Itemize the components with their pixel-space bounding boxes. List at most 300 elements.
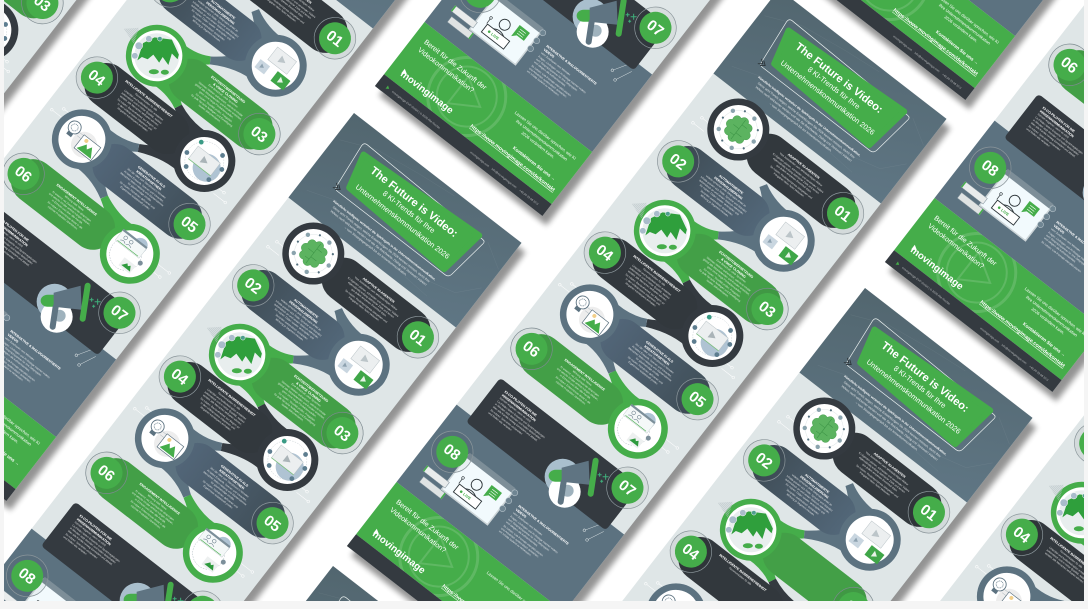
trend 01: 01 — [406, 326, 429, 350]
trend 04: wirklich alle Menschen teilhaben können. — [202, 393, 243, 426]
trend 04: automatisch und in hoher Qualität, sodass — [121, 91, 163, 125]
footer band: info@movingimage.com — [491, 167, 518, 190]
trend 01: Vom Assistenten zum selbstständigen Akteur — [779, 151, 824, 187]
trend 01: Vom Assistenten zum selbstständigen Akteur — [865, 450, 910, 486]
trend 02: Inhalte passen sich Rolle, Sprache und Standort — [786, 474, 834, 512]
header with title box: Unternehmenskommunikation 2026 — [865, 357, 963, 436]
trend 05: Von der Idee zum Storyboard in Minuten — [126, 167, 167, 200]
footer band: movingimage — [370, 529, 427, 577]
footer band: https://www.movingimage.com/de/kontakt — [469, 124, 556, 193]
trend 01: Freigaben beim Team belassen. — [348, 296, 381, 322]
header with title box: Künstliche Intelligenz verändert die Spielregeln in der Unternehmenskommunikation. — [843, 374, 948, 456]
trend 04: 04 — [679, 540, 703, 564]
trend 06 — [1036, 27, 1088, 187]
trend 06: 06 — [94, 462, 118, 485]
footer band: movingimage EVP GmbH | © 2026 Alle Rechte — [391, 90, 441, 130]
trend 04: Vorgaben konsequent einhalten. — [624, 281, 657, 308]
trend 06: ENGAGEMENT INTELLIGENCE — [564, 358, 606, 392]
trend 07: Co-Piloten liefern Entwürfe und Sprachregelungen — [496, 399, 546, 439]
trend 07 — [4, 212, 141, 354]
trend 03 — [124, 24, 281, 156]
trend 07: So nutzen: Szenarien vorbereiten — [1028, 124, 1062, 152]
trend 05: Von der Idee zum Storyboard in Minuten — [634, 342, 675, 375]
trend 06 — [510, 328, 668, 459]
footer band: movingimage — [908, 245, 965, 293]
trend 04: Kommunikation für alle — [1059, 549, 1084, 569]
trend 02: PERSONALISIERUNG — [205, 1, 236, 26]
trend 05: 05 — [260, 512, 284, 536]
footer band: Ihre Unternehmenskommunikation — [1025, 295, 1079, 338]
header — [267, 566, 501, 609]
trend 04: Untertitel und Audiodeskription entstehen — [206, 388, 248, 421]
trend 03: für jede Sprache festlegen und Einwilligung — [698, 268, 742, 303]
trend 08: zum Gesprächspartner für Ihre Zielgruppen — [535, 57, 579, 92]
trend 03: Eine Botschaft, viele Sprachen — [716, 258, 747, 284]
trend 08: um Inhalte laufend zu verbessern. — [526, 69, 561, 97]
trend 08 — [4, 554, 76, 601]
header with title box: Künstliche Intelligenz verändert die Spielregeln in der Unternehmenskommunikation. — [757, 75, 862, 157]
header with title box: 8 KI-Trends für Ihre — [381, 189, 437, 235]
trend 07: Co-Piloten liefern Entwürfe und Sprachregelungen — [1034, 115, 1084, 155]
poster: far right, lower part — [882, 0, 1088, 401]
trend 03: So nutzen: Tonalität prüfen, Freigaben — [195, 92, 234, 124]
connectors — [586, 184, 786, 403]
trend 01 — [781, 385, 966, 548]
poster: lower right — [430, 288, 1040, 609]
footer band: movingimage.com — [979, 326, 1001, 344]
trend 04: 04 — [1010, 523, 1034, 547]
trend 04: 04 — [85, 66, 109, 90]
header with title box: Diese acht Trends zeigen, welche Entwicklungen Sie 2026 kennen müssen, damit Ihre — [332, 205, 431, 283]
trend 06: in Echtzeit und über alle Kanäle. — [134, 497, 167, 524]
footer band: https://www.movingimage.com/de/kontakt — [979, 300, 1066, 369]
poster: centre-right — [344, 0, 954, 609]
trend 05: KREATIVPARTNER — [135, 169, 163, 192]
trend 03 — [207, 324, 364, 454]
trend 01: aus jedem einzelnen Durchlauf dazu. — [775, 163, 813, 194]
trend 07: KI-CO-PILOTEN FÜR DIE — [504, 389, 539, 418]
trend 04: Untertitel und Audiodeskription entstehen — [1048, 546, 1088, 579]
trend 02: So nutzen: Daten sauber verknüpfen und — [785, 482, 826, 516]
trend 02: Inhalte passen sich Rolle, Sprache und Standort — [700, 175, 748, 213]
trend 01: Freigaben beim Team belassen. — [773, 172, 806, 198]
trend 05 — [560, 284, 719, 420]
footer band — [896, 214, 1088, 385]
footer band: Ihre Unternehmenskommunikation — [938, 3, 992, 46]
trend 07: KRISENKOMMUNIKATION — [76, 517, 112, 547]
trend 03: & VOICE CLONING — [295, 381, 322, 403]
trend 08: Fragen, Umfragen und KI-Dialoge machen Videos — [509, 515, 559, 555]
trend 05: Ergebnisse redaktionell prüfen. — [202, 484, 234, 510]
trend 02: PERSONALISIERUNG — [288, 300, 319, 325]
trend 07: Co-Piloten liefern Entwürfe und Sprachregelungen — [71, 523, 121, 563]
header with title box — [288, 113, 522, 327]
trend 06: und welche Inhalte wirklich hängen bleiben, — [556, 367, 600, 402]
footer band: Lassen Sie uns darüber sprechen, wie KI — [514, 110, 577, 161]
trend 08: und Antworten systematisch auswerten, — [528, 66, 568, 99]
header with title box: – vom Strategiegespräch bis zur Krisenkommunikation. — [855, 401, 919, 452]
trend 06: Wirkung statt Views — [64, 194, 85, 212]
trend 07: Schnell reagieren, wenn es zählt — [499, 396, 532, 423]
trend 04: wirklich alle Menschen teilhaben können. — [119, 94, 160, 127]
trend 01: 01 — [323, 27, 346, 51]
trend 03: ECHTZEITÜBERSETZUNG — [210, 74, 247, 104]
trend 08: 08 — [978, 157, 1002, 180]
trend 06: 06 — [519, 338, 543, 361]
trend 07: KRISENKOMMUNIKATION — [501, 393, 537, 423]
trend 07: in Minuten statt Stunden und halten Botschaften — [1032, 118, 1080, 157]
connectors — [162, 308, 362, 527]
trend 08: und steigern die Aufmerksamkeit. — [505, 520, 539, 548]
trend 01: Freigaben beim Team belassen. — [859, 471, 892, 497]
trend 04: Kommunikation für alle — [217, 391, 242, 411]
trend 08: VIDEOS — [1053, 224, 1066, 235]
trend 08: Fragen, Umfragen und KI-Dialoge machen Videos — [1, 340, 51, 380]
footer band — [369, 499, 552, 609]
trend 01 — [282, 222, 440, 358]
trend 06: So nutzen: Erkenntnisse direkt in die — [555, 375, 592, 405]
poster: top centre, lower part — [375, 0, 726, 228]
header with title box: Unternehmenskommunikation 2026 — [354, 182, 452, 261]
footer band: movingimage.com — [892, 34, 914, 52]
trend 05: Menschen liefern Haltung und Markenstimme — [119, 171, 165, 208]
footer band: Bereit für die Zukunft der — [422, 39, 488, 92]
trend 02: automatisch an und wirken dadurch relevanter. — [784, 477, 831, 515]
trend 08: VIDEOS — [7, 333, 20, 344]
trend 04: Kommunikation für alle — [642, 267, 667, 287]
trend 05: KREATIVPARTNER — [643, 344, 671, 367]
trend 02: automatisch an und wirken dadurch relevanter. — [273, 302, 320, 340]
trend 05: Menschen liefern Haltung und Markenstimme — [202, 470, 248, 507]
trend 06: ENGAGEMENT INTELLIGENCE — [56, 183, 98, 217]
trend 02: Videos sprechen jede Zielgruppe direkt an — [705, 174, 748, 208]
trend 03: sauber dokumentieren. — [706, 278, 730, 298]
trend 06: So nutzen: Erkenntnisse direkt in die — [130, 499, 167, 529]
trend 03: So nutzen: Tonalität prüfen, Freigaben — [703, 267, 742, 299]
trend 02: Varianten automatisch ausspielen. — [700, 189, 734, 217]
trend 04: INTELLIGENTE BARRIEREFREIHEIT — [632, 254, 682, 294]
trend 04 — [986, 497, 1088, 609]
trend 02: 02 — [666, 150, 690, 174]
trend 07: KI-CO-PILOTEN FÜR DIE — [1042, 105, 1077, 134]
trend 07: über alle Kanäle hinweg konsistent und aktuell. — [67, 529, 114, 566]
trend 08: So nutzen: Live-Formate interaktiv planen — [502, 524, 544, 558]
trend 05: So nutzen: Richtlinien definieren und — [202, 479, 239, 509]
trend 07: und Rollen klar verteilen. — [62, 535, 88, 556]
trend 03 — [632, 200, 789, 330]
trend 04: automatisch und in hoher Qualität, sodass — [204, 390, 246, 424]
trend 06 — [4, 152, 160, 284]
trend 05: KI liefert Entwürfe, Szenen und Varianten, — [123, 170, 165, 203]
trend 03: sauber dokumentieren. — [281, 402, 305, 422]
footer band: movingimage.com — [469, 150, 491, 168]
trend 02: PERSONALISIERUNG — [713, 176, 744, 201]
trend 02: Wirkung je Segment messen. — [192, 18, 222, 43]
trend 06: nächste Produktion überführen. — [555, 380, 587, 406]
trend 03: & VOICE CLONING — [720, 257, 747, 279]
footer band: +49 30 33 08 22 0 — [941, 72, 963, 90]
trend 04: INTELLIGENTE BARRIEREFREIHEIT — [207, 378, 257, 418]
trend 07: in Minuten statt Stunden und halten Botschaften — [494, 402, 542, 441]
poster: far right bottom edge — [761, 271, 1088, 609]
trend 02: Varianten automatisch ausspielen. — [192, 14, 226, 42]
trend 05: KI liefert Entwürfe, Szenen und Varianten, — [631, 345, 673, 378]
trend 08: INTERAKTIVE & DIALOGORIENTIERTE — [9, 329, 62, 371]
trend 01: eigenständig entlang definierter Ziele und lernen — [772, 156, 821, 195]
trend 02: So nutzen: Daten sauber verknüpfen und — [699, 183, 740, 217]
trend 02: Videos sprechen jede Zielgruppe direkt an — [791, 473, 834, 507]
footer band — [892, 0, 1000, 89]
footer band: Kontaktieren Sie uns → — [1022, 321, 1067, 358]
trend 07: KI-CO-PILOTEN FÜR DIE — [79, 513, 114, 542]
poster: left column — [0, 0, 446, 510]
trend 03 — [1026, 458, 1088, 609]
trend 06: KI erkennt, wo Zuschauende abspringen — [135, 489, 175, 522]
trend 02: Varianten automatisch ausspielen. — [275, 313, 309, 341]
trend 03: 03 — [330, 422, 354, 446]
trend 04: INTELLIGENTE BARRIEREFREIHEIT — [124, 79, 174, 119]
header with title box: – vom Strategiegespräch bis zur Krisenkommunikation. — [769, 102, 833, 153]
trend 06: Wirkung statt Views — [147, 493, 168, 511]
trend 08: Vom Zuschauen zum Mitreden — [1050, 227, 1082, 253]
trend 03: Eine Botschaft, viele Sprachen — [291, 382, 322, 408]
header with title box: Diese acht Trends zeigen, welche Entwicklungen Sie 2026 kennen müssen, damit Ihre — [757, 81, 856, 159]
trend 01: Vom Assistenten zum selbstständigen Akteur — [354, 275, 399, 311]
trend 03: global alle Mitarbeitenden und Kunden erreichen, — [277, 381, 326, 420]
trend 08: zum Gesprächspartner für Ihre Zielgruppen — [0, 342, 43, 377]
trend 01: 01 — [917, 501, 940, 525]
trend 02: 02 — [241, 274, 265, 298]
trend 03: sauber dokumentieren. — [198, 103, 222, 123]
trend 08: 08 — [440, 441, 464, 464]
trend 01 — [250, 0, 356, 60]
trend 07: So nutzen: Szenarien vorbereiten — [65, 532, 99, 560]
trend 08: Vom Zuschauen zum Mitreden — [540, 51, 572, 77]
trend 07: in Minuten statt Stunden und halten Botschaften — [69, 526, 117, 565]
trend 04: Kommunikation für alle — [728, 566, 753, 586]
trend 03: ECHTZEITÜBERSETZUNG — [718, 249, 755, 279]
trend 07: Schnell reagieren, wenn es zählt — [1037, 112, 1070, 139]
trend 01: aus jedem einzelnen Durchlauf dazu. — [861, 462, 899, 493]
trend 02 — [657, 140, 815, 272]
trend 02: AUTOMATISIERTE — [804, 473, 831, 495]
header with title box — [713, 0, 947, 203]
trend 03: Stimmen bleiben authentisch, während Inhalte — [281, 380, 327, 417]
trend 02 — [232, 264, 390, 396]
trend 03: & VOICE CLONING — [212, 82, 239, 104]
trend 02: Wirkung je Segment messen. — [786, 492, 816, 517]
trend 02: PERSONALISIERUNG — [799, 475, 830, 500]
footer band — [386, 38, 580, 209]
trend 05 — [134, 408, 294, 544]
trend 01: ADAPTIVE KI-AGENTEN — [873, 452, 907, 479]
trend 02: AUTOMATISIERTE — [718, 174, 745, 196]
footer band: Ihre Unternehmenskommunikation — [515, 119, 569, 162]
trend 05: 05 — [685, 388, 709, 412]
trend 01: eigenständig entlang definierter Ziele und lernen — [858, 455, 907, 494]
footer band: movingimage EVP GmbH | © 2026 Alle Rechte — [901, 266, 951, 306]
trend 04: Vorgaben konsequent einhalten. — [116, 106, 149, 133]
trend 04: So nutzen: Barrierefreiheit von Beginn an — [624, 272, 666, 306]
footer band: info@movingimage.com — [914, 51, 941, 74]
header with title box: – vom Strategiegespräch bis zur Krisenkommunikation. — [344, 226, 408, 277]
trend 08 — [947, 139, 1088, 294]
header with title box: The Future is Video: — [793, 41, 885, 116]
footer band: +49 30 33 08 22 0 — [518, 188, 540, 206]
trend 01: aus jedem einzelnen Durchlauf dazu. — [350, 287, 388, 318]
trend 04 — [584, 232, 744, 367]
trend 08: VIDEOS — [543, 48, 556, 59]
footer band: Bereit für die Zukunft der — [932, 215, 998, 268]
footer band: https://www.movingimage.com/de/kontakt — [892, 8, 979, 77]
trend 02: Varianten automatisch ausspielen. — [786, 488, 820, 516]
trend 03: für jede Sprache festlegen und Einwilligung — [190, 93, 234, 128]
trend 03: So nutzen: Tonalität prüfen, Freigaben — [278, 391, 317, 423]
trend 07: Schnell reagieren, wenn es zählt — [74, 520, 107, 547]
trend 08: und steigern die Aufmerksamkeit. — [533, 60, 567, 88]
trend 06: in Echtzeit und über alle Kanäle. — [559, 373, 592, 400]
trend 05: KI liefert Entwürfe, Szenen und Varianten, — [206, 469, 248, 502]
trend 01: So nutzen: Routineprozesse übergeben und — [769, 164, 814, 200]
trend 08: Vom Zuschauen zum Mitreden — [512, 511, 544, 537]
trend 06 — [85, 452, 243, 583]
trend 02: So nutzen: Daten sauber verknüpfen und — [274, 307, 315, 341]
trend 08 — [4, 310, 61, 383]
trend 08: Vom Zuschauen zum Mitreden — [4, 336, 36, 362]
trend 04: automatisch und in hoher Qualität, sodass — [629, 266, 671, 300]
footer band: Kontaktieren Sie uns → — [935, 29, 980, 66]
footer band: 2026 verändern kann. — [1030, 306, 1066, 335]
trend 01 — [707, 98, 864, 234]
trend 08: So nutzen: Live-Formate interaktiv planen — [530, 64, 572, 98]
trend 07: über alle Kanäle hinweg konsistent und aktuell. — [492, 405, 539, 442]
trend 04: in den Videoprozess integrieren und — [117, 102, 154, 132]
trend 07: und Rollen klar verteilen. — [1025, 127, 1051, 148]
footer band: Kontaktieren Sie uns → — [512, 145, 557, 182]
trend 07 — [992, 84, 1088, 269]
trend 07: 07 — [107, 302, 131, 325]
trend 05: für glaubwürdige Inhalte. — [210, 480, 236, 502]
trend 01: So nutzen: Routineprozesse übergeben und — [344, 288, 389, 324]
trend 02: Videos sprechen jede Zielgruppe direkt an — [197, 0, 240, 33]
trend 01: ADAPTIVE KI-AGENTEN — [362, 277, 396, 304]
trend 01: eigenständig entlang definierter Ziele und lernen — [347, 280, 396, 319]
footer band: 2026 verändern kann. — [520, 130, 556, 159]
trend 05: 05 — [177, 213, 201, 237]
trend 04: automatisch und in hoher Qualität, sodass — [1046, 548, 1088, 582]
connectors — [641, 451, 886, 609]
footer band: Videokommunikation? — [926, 223, 985, 271]
trend 08: INTERAKTIVE & DIALOGORIENTIERTE — [517, 504, 570, 546]
footer band: Videokommunikation? — [416, 47, 475, 95]
trend 02: Inhalte passen sich Rolle, Sprache und Standort — [275, 299, 323, 337]
trend 03: ganz ohne lange Produktionszeiten. — [281, 389, 318, 418]
trend 02: Wirkung je Segment messen. — [275, 317, 305, 342]
trend 06: So nutzen: Erkenntnisse direkt in die — [47, 200, 84, 230]
trend 04 — [76, 56, 236, 192]
trend 05: Menschen liefern Haltung und Markenstimme — [627, 346, 673, 383]
trend 04: in den Videoprozess integrieren und — [625, 277, 662, 307]
trend 01: ADAPTIVE KI-AGENTEN — [787, 153, 821, 180]
trend 01: KI-Agenten planen, schneiden und versenden Videos — [347, 276, 400, 318]
trend 05: Von der Idee zum Storyboard in Minuten — [209, 466, 250, 499]
trend 03: 03 — [247, 123, 271, 147]
trend 05: GENERATIVE KI ALS — [220, 464, 250, 488]
trend 08: INTERAKTIVE & DIALOGORIENTIERTE — [545, 44, 598, 86]
trend 03: Stimmen bleiben authentisch, während Inhalte — [198, 81, 244, 118]
trend 03: global alle Mitarbeitenden und Kunden erreichen, — [194, 82, 243, 121]
trend 07: und Rollen klar verteilen. — [487, 411, 513, 432]
trend 02 — [730, 422, 913, 583]
trend 02 — [154, 0, 307, 97]
trend 08: 08 — [15, 565, 39, 588]
header with title box: Videos noch wirksamer werden und wie Sie Reichweite, Dialog und Vertrauen stärken — [840, 384, 939, 462]
trend 05: KREATIVPARTNER — [218, 468, 246, 491]
trend 08: zum Gesprächspartner für Ihre Zielgruppen — [507, 517, 551, 552]
trend 07: über alle Kanäle hinweg konsistent und aktuell. — [1030, 121, 1077, 158]
trend 04: Untertitel und Audiodeskription entstehen — [123, 89, 165, 122]
header with title box — [799, 288, 1033, 502]
trend 05: GENERATIVE KI ALS — [137, 165, 167, 189]
footer band: Bereit für die Zukunft der — [394, 499, 460, 552]
trend 04: wirklich alle Menschen teilhaben können. — [1044, 551, 1085, 584]
trend 08: und steigern die Aufmerksamkeit. — [1043, 236, 1077, 264]
trend 05: Ergebnisse redaktionell prüfen. — [627, 360, 659, 386]
trend 01: 01 — [831, 202, 854, 226]
trend 04: INTELLIGENTE BARRIEREFREIHEIT — [718, 553, 768, 593]
trend 03 — [695, 475, 891, 609]
trend 05: Ergebnisse redaktionell prüfen. — [119, 185, 151, 211]
trend 07 — [42, 503, 221, 601]
trend 08: um Inhalte laufend zu verbessern. — [498, 529, 533, 557]
trend 08: zum Gesprächspartner für Ihre Zielgruppen — [1045, 233, 1088, 268]
header with title box: Videos noch wirksamer werden und wie Sie Reichweite, Dialog und Vertrauen stärken — [754, 85, 853, 163]
trend 02: Videos sprechen jede Zielgruppe direkt an — [280, 298, 323, 332]
footer band: +49 30 33 08 22 0 — [1028, 364, 1050, 382]
trend 06: nächste Produktion überführen. — [130, 504, 162, 530]
trend 05: GENERATIVE KI ALS — [645, 340, 675, 364]
trend 06: KI erkennt, wo Zuschauende abspringen — [560, 365, 600, 398]
footer band: Lassen Sie uns darüber sprechen, wie KI — [1024, 286, 1087, 337]
header with title box: Videos noch wirksamer werden und wie Sie Reichweite, Dialog und Vertrauen stärken — [329, 209, 428, 287]
trend 04: So nutzen: Barrierefreiheit von Beginn an — [116, 97, 158, 131]
trend 07: 07 — [643, 17, 667, 40]
trend 04: Untertitel und Audiodeskription entstehen — [631, 264, 673, 297]
trend 06: KI erkennt, wo Zuschauende abspringen — [52, 190, 92, 223]
trend 08 — [419, 430, 569, 558]
trend 02: Inhalte passen sich Rolle, Sprache und Standort — [192, 0, 240, 38]
trend 03: ECHTZEITÜBERSETZUNG — [293, 373, 330, 403]
footer band: 2026 verändern kann. — [943, 14, 979, 43]
trend 07: 07 — [615, 477, 639, 500]
trend 08: und Antworten systematisch auswerten, — [500, 526, 540, 559]
header with title box: 8 KI-Trends für Ihre — [892, 364, 948, 410]
footer call to action — [4, 415, 40, 465]
header with title box: The Future is Video: — [368, 165, 460, 240]
trend 03: ganz ohne lange Produktionszeiten. — [706, 265, 743, 294]
footer band: Videokommunikation? — [388, 507, 447, 555]
trend 04: 04 — [593, 241, 617, 265]
trend 07: KRISENKOMMUNIKATION — [1039, 109, 1075, 139]
trend 04 — [158, 356, 318, 491]
trend 02: 02 — [752, 449, 776, 473]
trend 04: wirklich alle Menschen teilhaben können. — [627, 269, 668, 302]
trend 04: So nutzen: Barrierefreiheit von Beginn an — [199, 396, 241, 430]
trend 04: in den Videoprozess integrieren und — [200, 401, 237, 431]
trend 03: 03 — [755, 298, 779, 322]
trend 08 — [447, 0, 597, 98]
trend 03: Eine Botschaft, viele Sprachen — [208, 83, 239, 109]
